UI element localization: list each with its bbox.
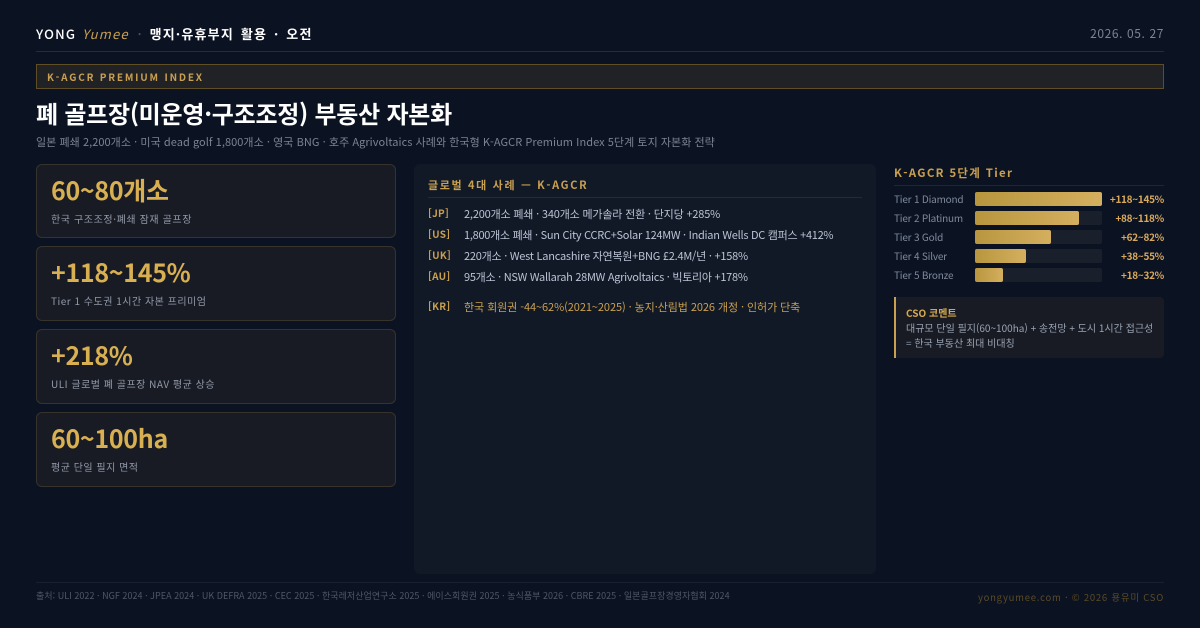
header brand line: YONG Yumee · 맹지·유휴부지 활용 · 오전 [36,24,313,43]
stat card: area [36,412,396,487]
case: Australia: 95개소 · NSW Wallarah 28MW Agrivoltaics · 빅토리아 +178% [464,269,748,285]
footer divider [36,582,1164,583]
panel: global cases [414,164,876,574]
tier 5: +18~32% [1121,267,1164,282]
stat card: NAV: ULI 글로벌 폐 골프장 NAV 평균 상승 [51,376,215,391]
tier 3: +62~82% [1121,229,1164,244]
stat card: NAV: +218% [51,337,133,373]
stat card: tier 1 premium: Tier 1 수도권 1시간 자본 프리미엄 [51,293,206,308]
bar chart: tiers [894,191,1164,282]
stat card: closures: 한국 구조조정·폐쇄 잠재 골프장 [51,211,192,226]
stat card: closures: 60~80개소 [51,172,169,208]
date: 2026. 05. 27 [1090,25,1164,42]
tier 2: Tier 2 Platinum [894,210,963,225]
stat card: area: 평균 단일 필지 면적 [51,459,138,474]
tier 1 [894,191,1164,206]
tier 3: Tier 3 Gold [894,229,943,244]
stat card: closures [36,164,396,238]
case: Australia: [AU] [428,268,451,283]
callout: CSO comment: = 한국 부동산 최대 비대칭 [906,335,1015,350]
tier 5: Tier 5 Bronze [894,267,953,282]
stat card: NAV [36,329,396,404]
callout: CSO comment: 대규모 단일 필지(60~100ha) + 송전망 + 도시 1시간 접근성 [906,320,1153,335]
case: UK: 220개소 · West Lancashire 자연복원+BNG £2.4M/년 · +158% [464,248,748,264]
index band: K-AGCR PREMIUM INDEX [47,69,204,84]
stat card: tier 1 premium: +118~145% [51,254,190,290]
tier 3 [894,229,1164,244]
case: Japan: 2,200개소 폐쇄 · 340개소 메가솔라 전환 · 단지당 +285% [464,206,720,222]
callout: CSO comment [894,297,1164,358]
case: Japan: [JP] [428,205,449,220]
subtitle: 일본 폐쇄 2,200개소 · 미국 dead golf 1,800개소 · 영국 BNG · 호주 Agrivoltaics 사례와 한국형 K-AGCR Premium Index 5단계 토지 자본화 전략 [36,134,715,150]
case: US: [US] [428,226,450,241]
tier 4: +38~55% [1121,248,1164,263]
tier heading: K-AGCR 5단계 Tier [894,165,1013,181]
tier 4: Tier 4 Silver [894,248,947,263]
index band [36,64,1164,89]
case: Korea: [KR] [428,298,450,313]
tier 2 [894,210,1164,225]
tier 1: Tier 1 Diamond [894,191,963,206]
stat card: area: 60~100ha [51,420,168,456]
tier 2: +88~118% [1115,210,1164,225]
stat card: tier 1 premium [36,246,396,321]
panel heading: 글로벌 4대 사례 — K-AGCR [428,177,588,193]
title: 폐 골프장(미운영·구조조정) 부동산 자본화 [36,95,452,130]
case: UK: [UK] [428,247,451,262]
tier 5 [894,267,1164,282]
tier 4 [894,248,1164,263]
tier 1: +118~145% [1110,191,1164,206]
header divider [36,51,1164,52]
case: US: 1,800개소 폐쇄 · Sun City CCRC+Solar 124MW · Indian Wells DC 캠퍼스 +412% [464,227,833,243]
footer credit: yongyumee.com · © 2026 용유미 CSO [978,590,1164,604]
case: Korea: 한국 회원권 -44~62%(2021~2025) · 농지·산림법 2026 개정 · 인허가 단축 [464,299,800,315]
sources: 출처: ULI 2022 · NGF 2024 · JPEA 2024 · UK DEFRA 2025 · CEC 2025 · 한국레저산업연구소 2025 · 에이스회원권 2025 · 농식품부 2026 · CBRE 2025 · 일본골프장경영자협회 2024 [36,589,730,602]
callout: CSO comment: CSO 코멘트 [906,305,957,320]
